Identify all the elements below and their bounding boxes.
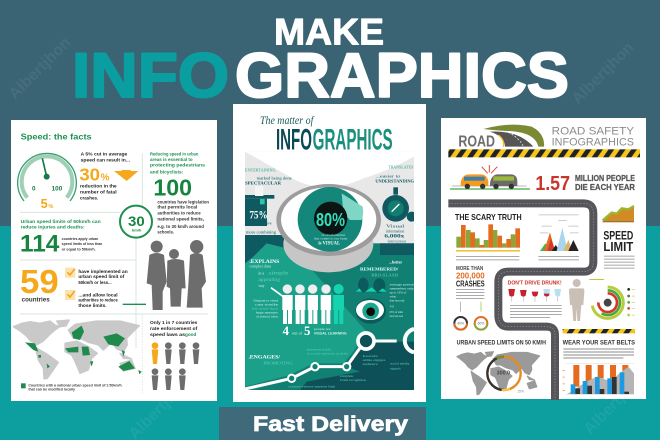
bar chart: scary truth	[456, 224, 520, 252]
bar chart: seat belts	[563, 363, 634, 394]
background: dark top band	[0, 0, 660, 226]
icon: human figure	[569, 279, 584, 321]
title: GRAPHICS	[235, 41, 569, 111]
world map with donut	[457, 352, 540, 395]
heading: road safety infographics: ROAD SAFETY	[552, 125, 634, 137]
section: engages: increases traffic	[307, 347, 332, 351]
speed limit block: SPEED	[603, 228, 634, 242]
checklist: 50km/h or less...	[78, 280, 112, 285]
stat: 30 percent reduction: crashes.	[80, 196, 98, 201]
stat: 200,000 crashes: 200,000	[456, 271, 485, 280]
pictogram: seven people	[152, 342, 199, 390]
icon: speedometer gauge: %	[48, 204, 53, 210]
watermarks: Albertjhon	[569, 39, 637, 108]
heading: infographics	[276, 124, 393, 157]
section: engages: social media	[390, 362, 410, 366]
section: explains	[249, 260, 288, 319]
stat: 30 percent reduction: %	[101, 172, 110, 183]
block: stopwatch and understanding: 6,000x	[384, 233, 405, 239]
watermarks: Albertjhon	[581, 369, 649, 438]
stat: 1.57 million: MILLION PEOPLE	[575, 174, 636, 183]
stat: 200,000 crashes: CRASHES	[456, 279, 485, 288]
stat: 59 countries: 59	[20, 264, 59, 301]
badge: fast delivery	[219, 407, 426, 440]
section: engages	[248, 347, 410, 389]
road path	[448, 203, 593, 400]
watermarks: Albertjhon	[6, 34, 74, 103]
pictogram: five learners	[271, 284, 344, 324]
stat: 4 out of 5: out of	[292, 330, 303, 335]
badge: fast delivery: Fast Delivery	[253, 413, 408, 436]
map legend: that can be modified locally	[28, 387, 76, 392]
section: remembered	[356, 260, 414, 318]
stat: 4 out of 5: VISUAL LEARNING	[314, 331, 347, 335]
section: remembered: remembers only	[390, 287, 414, 291]
section: remembered: what	[390, 295, 396, 299]
section: explains: simple	[268, 271, 288, 276]
stat: 114 countries: Urban speed limits of 50km/h can	[21, 219, 101, 224]
peak chart	[539, 214, 579, 251]
section: engages: to social network activity	[307, 351, 349, 355]
icon: speedometer gauge: 5	[41, 197, 48, 211]
world map	[13, 320, 142, 379]
section: explains: Diagram or visual	[253, 299, 278, 303]
stat: 30 percent reduction: A 5% cut in average	[81, 152, 128, 157]
section: remembered: average person	[390, 283, 414, 287]
checklist: have implemented an	[78, 269, 128, 274]
section: remembered: they has read	[390, 299, 405, 303]
section: remembered: VS	[390, 305, 394, 309]
label: spectacular	[245, 169, 292, 196]
stat: 100 countries: authorities to reduce	[157, 211, 201, 216]
map legend	[21, 382, 122, 392]
checklist: ...and allow local	[78, 292, 118, 297]
title	[72, 12, 569, 111]
stat: 1.57 million: DIE EACH YEAR	[575, 182, 636, 192]
illustration: giant eye poster	[245, 152, 417, 390]
stat: 114 countries	[20, 219, 103, 258]
block: stopwatch and understanding: ...easier to	[375, 174, 401, 178]
stat: 100 countries: protecting pedestrians	[150, 162, 205, 167]
block: stopwatch and understanding	[375, 165, 417, 255]
hazard stripe	[448, 149, 640, 157]
heading: don't drive drunk: DON'T DRIVE DRUNK!	[508, 280, 562, 286]
stat: 100 countries: e.g. to 30 km/h around	[157, 224, 204, 229]
block: stopwatch and understanding: UNDERSTANDING	[375, 179, 414, 184]
section: explains: of abstract ideas	[256, 315, 279, 319]
heading: the scary truth: THE SCARY TRUTH	[455, 212, 522, 222]
panel: the matter of infographics	[233, 104, 426, 402]
section: explains: in a	[258, 270, 264, 275]
section: remembered: they has seen	[390, 314, 403, 318]
heading: urban speed limits: URBAN SPEED LIMITS ON 50 KM/H	[457, 340, 546, 346]
dividers	[20, 314, 208, 393]
block: stopwatch and understanding: information	[386, 229, 405, 233]
icon: speedometer gauge: 100	[52, 185, 63, 192]
stat: 114 countries: reduce injuries and deaths:	[21, 225, 85, 230]
section: explains: help people digest	[252, 307, 278, 311]
world map with donut: 300.0	[497, 370, 510, 376]
section: engages: boosts	[363, 354, 379, 358]
stat: 100 countries: 100	[153, 175, 192, 201]
icon: 30 km/h sign: 30	[128, 213, 145, 229]
panel: road safety infographics	[441, 118, 646, 400]
heading: road safety infographics	[552, 125, 634, 148]
stat: 1 in 7 countries: Only 1 in 7 countries	[150, 320, 198, 325]
stat: 100 countries: countries have legislation	[157, 200, 209, 205]
heading: wear your seat belts: WEAR YOUR SEAT BELTS	[563, 340, 635, 347]
stat: 100 countries: national speed limits,	[157, 216, 204, 221]
icon: eye with 80 percent: that comes to our brain	[314, 236, 348, 240]
icon: speedometer gauge: 0	[32, 185, 36, 192]
radial legend	[589, 279, 635, 316]
text lines	[456, 256, 635, 359]
stat: 100 countries: and bicyclists:	[150, 170, 184, 175]
section: explains: complex data	[249, 265, 271, 269]
stat: 114 countries: countries apply urban	[62, 236, 99, 241]
checklist: those limits.	[78, 303, 107, 308]
stat: 1 in 7 countries: good	[185, 332, 197, 337]
block: stopwatch and understanding: faster to process	[388, 239, 406, 243]
icon: crashed cars	[450, 165, 530, 190]
stat: 30 percent reduction: number of fatal	[80, 189, 117, 194]
logo: road	[458, 125, 544, 151]
block: 75 percent: Exclusive	[256, 221, 272, 226]
section: remembered: up to 10% of	[390, 291, 407, 295]
stat: 30 percent reduction: reduction in the	[80, 184, 117, 189]
stat: 1 in 7 countries: rate enforcement of	[150, 326, 198, 331]
stat: 59 countries: countries	[22, 297, 50, 303]
stat: 30 percent reduction	[79, 152, 138, 201]
stat: 4 out of 5: 5	[304, 324, 310, 338]
section: engages: creates viewer interest link	[288, 385, 335, 389]
logo: road: ROAD	[458, 134, 495, 151]
stat: 1.57 million	[535, 173, 636, 195]
stat: 100 countries: schools.	[157, 230, 174, 235]
section: engages: strengthens	[340, 374, 354, 378]
background: teal lower band	[0, 226, 660, 440]
section: explains: huge amounts	[256, 311, 279, 315]
block: 75 percent: more combining	[246, 230, 276, 235]
section: remembered: ...better	[389, 260, 402, 265]
icon: small eye	[355, 298, 386, 324]
icon: eye with 80 percent: 80%	[316, 209, 345, 230]
icon: 30 km/h sign: km/h	[132, 228, 142, 233]
icon: wine glasses	[508, 289, 561, 302]
section: remembered: BRO-SLASH	[371, 273, 398, 277]
world map with donut: 15%	[517, 389, 524, 393]
stat: 200,000 crashes: MORE THAN	[456, 266, 483, 272]
heading: infographics: INFO	[276, 124, 312, 157]
stat: 30 percent reduction: speed can result in...	[81, 158, 130, 163]
stat: 100 countries	[150, 152, 209, 235]
stat: 1.57 million: 1.57	[535, 173, 570, 195]
checklist: authorities to reduce	[78, 297, 118, 302]
section: engages: signals	[390, 366, 401, 370]
section: explains: way	[258, 284, 265, 288]
label: spectacular: ENTERTAINING	[245, 169, 276, 173]
stat: 30 percent reduction: 30	[79, 164, 100, 184]
block: stopwatch and understanding: Visual	[386, 225, 404, 229]
section: engages: PROMOTING	[263, 362, 293, 366]
stat: 114 countries: or equal to 50km/h.	[62, 246, 96, 251]
section: explains: .EXPLAINS	[249, 260, 280, 265]
section: remembered: REMEMBERED/	[360, 266, 399, 271]
section: engages: .ENGAGES/	[248, 355, 281, 360]
block: 75 percent: 75%	[249, 209, 268, 221]
icon: two ring gauges: 60%	[478, 322, 484, 326]
heading: road safety infographics: INFOGRAPHICS	[552, 136, 634, 148]
heading: infographics: GRAPHICS	[313, 124, 393, 157]
panel: speed the facts	[11, 120, 217, 401]
map legend: Countries with a national urban speed limit of ≤ 50km/h	[28, 382, 122, 387]
block: stopwatch and understanding: TRANSLATES	[388, 165, 413, 169]
dividers	[20, 153, 142, 348]
icon: eye with 80 percent: of all information	[322, 233, 345, 237]
label: spectacular: marked being done	[257, 176, 292, 180]
title: MAKE	[274, 12, 384, 52]
stat: 200,000 crashes	[456, 266, 485, 288]
stat: 4 out of 5: 4	[283, 324, 290, 338]
stat: 4 out of 5	[283, 324, 347, 338]
section: remembered: 65% of what	[390, 310, 403, 314]
title: INFO	[72, 41, 229, 111]
block: 75 percent	[245, 195, 284, 264]
icon: two ring gauges: 40%	[457, 322, 464, 326]
section: explains: appealing	[258, 278, 281, 283]
icon: eye with 80 percent	[276, 184, 381, 272]
icon: two ring gauges	[454, 302, 487, 330]
stat: 100 countries: areas is essential to	[150, 157, 193, 162]
icon: people silhouettes	[147, 240, 206, 310]
section: engages: online engages	[363, 358, 386, 362]
checklist: urban speed limit of	[78, 274, 125, 279]
radial chart	[592, 287, 623, 318]
label: spectacular: SPECTACULAR	[245, 181, 281, 186]
checklist	[65, 268, 146, 308]
chart: rising white line	[245, 329, 414, 389]
stat: 4 out of 5: people are	[314, 327, 331, 331]
section: engages: audience	[363, 362, 378, 366]
icon: speedometer gauge	[18, 153, 76, 211]
heading: speed the facts: Speed: the facts	[21, 133, 92, 142]
speed limit block: LIMIT	[603, 240, 634, 254]
hazard stripe small	[563, 329, 635, 333]
speed limit block	[603, 206, 634, 254]
heading: the matter of: The matter of	[260, 115, 315, 127]
stat: 114 countries: speed limits of less than	[62, 241, 103, 246]
section: engages: brand recognition	[340, 378, 366, 382]
icon: eye with 80 percent: is VISUAL	[318, 241, 340, 246]
icon: 30 km/h sign	[120, 206, 152, 238]
stat: 1 in 7 countries	[150, 320, 198, 337]
stat: 1 in 7 countries: speed laws as	[150, 332, 185, 337]
stat: 114 countries: 114	[20, 231, 60, 258]
stat: 100 countries: that permits local	[157, 205, 197, 210]
section: explains: can easily	[255, 303, 279, 307]
stat: 100 countries: Reducing speed in urban	[150, 152, 198, 157]
